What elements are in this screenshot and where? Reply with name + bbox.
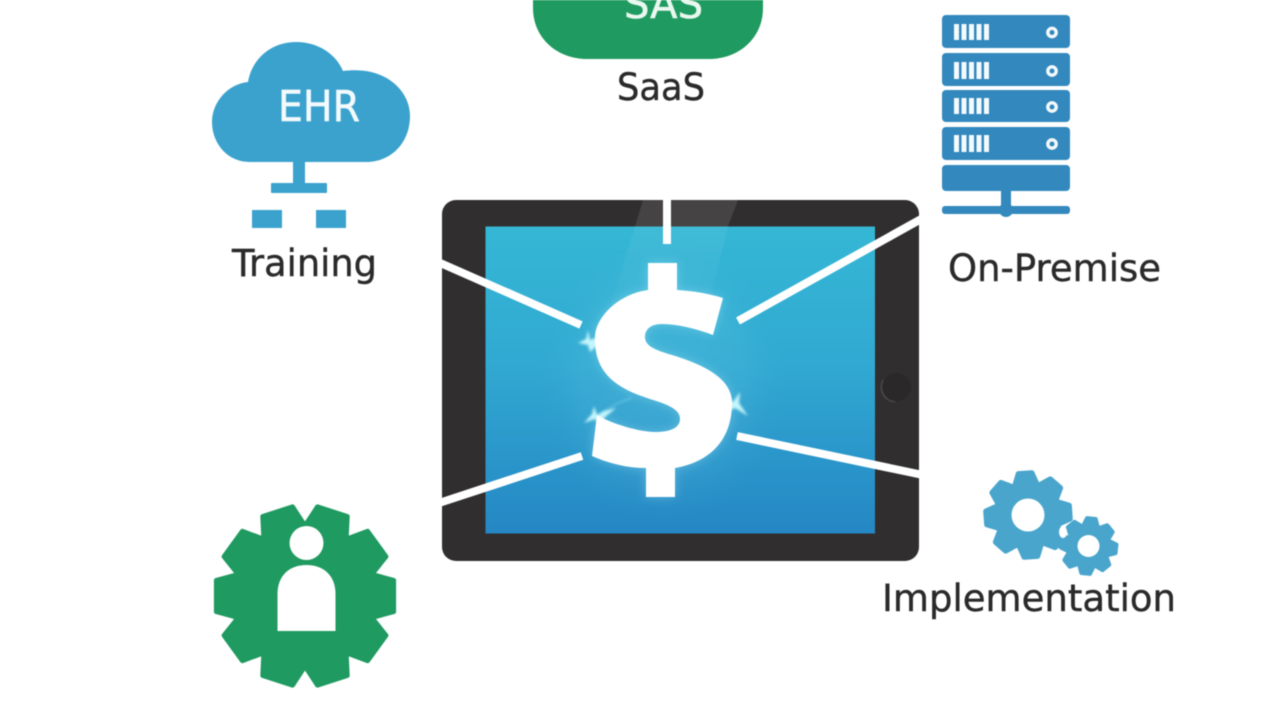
icon: EHR cloud: EHR	[278, 82, 360, 132]
icon: EHR cloud	[212, 42, 410, 228]
connector lines	[436, 196, 923, 504]
label: Implementation: Implementation	[882, 577, 1176, 620]
tablet home button	[881, 373, 911, 402]
sparkles	[578, 330, 748, 425]
icon: blue gears	[984, 471, 1119, 576]
dollar glow	[537, 235, 787, 525]
icon: green gear with person	[216, 507, 394, 685]
label: SaaS: SaaS	[617, 66, 705, 109]
tablet body	[442, 200, 919, 561]
icon: server stack	[942, 15, 1070, 217]
label: On-Premise: On-Premise	[948, 247, 1161, 290]
tablet glare	[635, 200, 738, 226]
dollar halo	[592, 263, 732, 497]
tablet	[436, 196, 923, 561]
screen shine	[600, 226, 728, 340]
label: Training: Training	[231, 242, 377, 285]
icon: SAS green badge	[533, 0, 763, 59]
small gear	[1058, 516, 1119, 576]
big gear	[984, 471, 1072, 559]
tablet screen	[486, 226, 875, 534]
spark arc	[600, 398, 632, 416]
dollar sign icon	[592, 263, 732, 497]
